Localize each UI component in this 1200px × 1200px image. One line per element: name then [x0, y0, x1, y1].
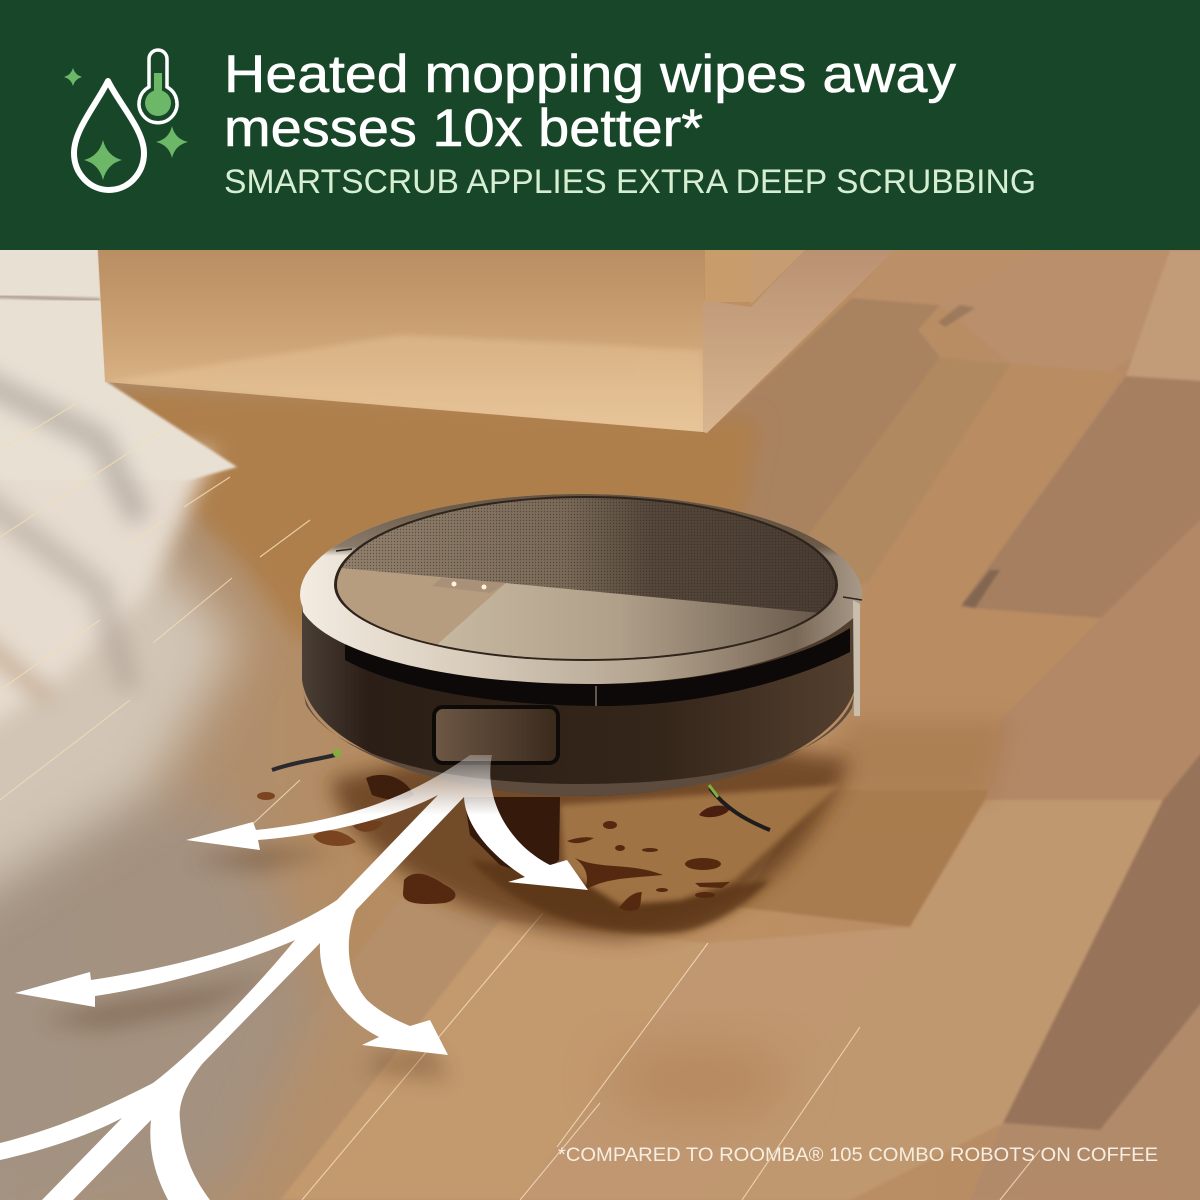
front sensor window [434, 707, 558, 763]
lit floor under robot [560, 785, 840, 905]
heading line 1: Heated mopping wipes away [224, 45, 957, 104]
robot body [302, 600, 857, 796]
control lights [432, 578, 506, 593]
photo: floor, cabinet and shadows [0, 240, 1200, 1200]
arrow shadows [40, 845, 450, 1080]
coffee spills [257, 775, 730, 911]
sunlit patch with window shadows [0, 240, 240, 930]
shadow crescent [470, 860, 770, 933]
rim extrusion [302, 604, 860, 684]
top plate [337, 498, 835, 659]
subheading: SMARTSCRUB APPLIES EXTRA DEEP SCRUBBING [224, 163, 1036, 201]
icon: right sparkle [156, 126, 188, 158]
dark window band [345, 628, 850, 706]
inner ring [334, 496, 838, 661]
cabinet front face [98, 250, 705, 432]
header band [0, 0, 1200, 250]
front glossy panel [438, 583, 817, 659]
cabinet rear face [751, 250, 805, 304]
mesh area [330, 490, 850, 660]
rim back shading [323, 494, 837, 556]
icon: drop [74, 81, 144, 190]
icon: drop sparkle [84, 140, 122, 180]
icon: water drop with thermometer and sparkles [64, 50, 188, 190]
tan left panel [337, 568, 506, 647]
robot vacuum [300, 490, 862, 796]
side brush left [272, 749, 341, 770]
cabinet side face [703, 250, 895, 433]
rim top [300, 494, 862, 649]
side brush right [709, 785, 770, 830]
robot shadow on floor [330, 720, 850, 938]
arrows: airflow branching from the robot [0, 755, 588, 1200]
icon: thermometer [139, 50, 177, 123]
heading line 2: messes 10x better* [224, 99, 703, 158]
plank seams [0, 403, 1040, 1200]
icon: small sparkle [64, 68, 82, 86]
footnote: *COMPARED TO ROOMBA® 105 COMBO ROBOTS ON COFFEE [558, 1145, 1158, 1166]
rim notches [336, 549, 862, 600]
soft floor patches [102, 382, 1006, 1200]
cabinet panel [705, 250, 751, 302]
wood knots [938, 305, 1000, 608]
floor planks [282, 250, 1200, 1200]
cabinet [98, 250, 895, 433]
